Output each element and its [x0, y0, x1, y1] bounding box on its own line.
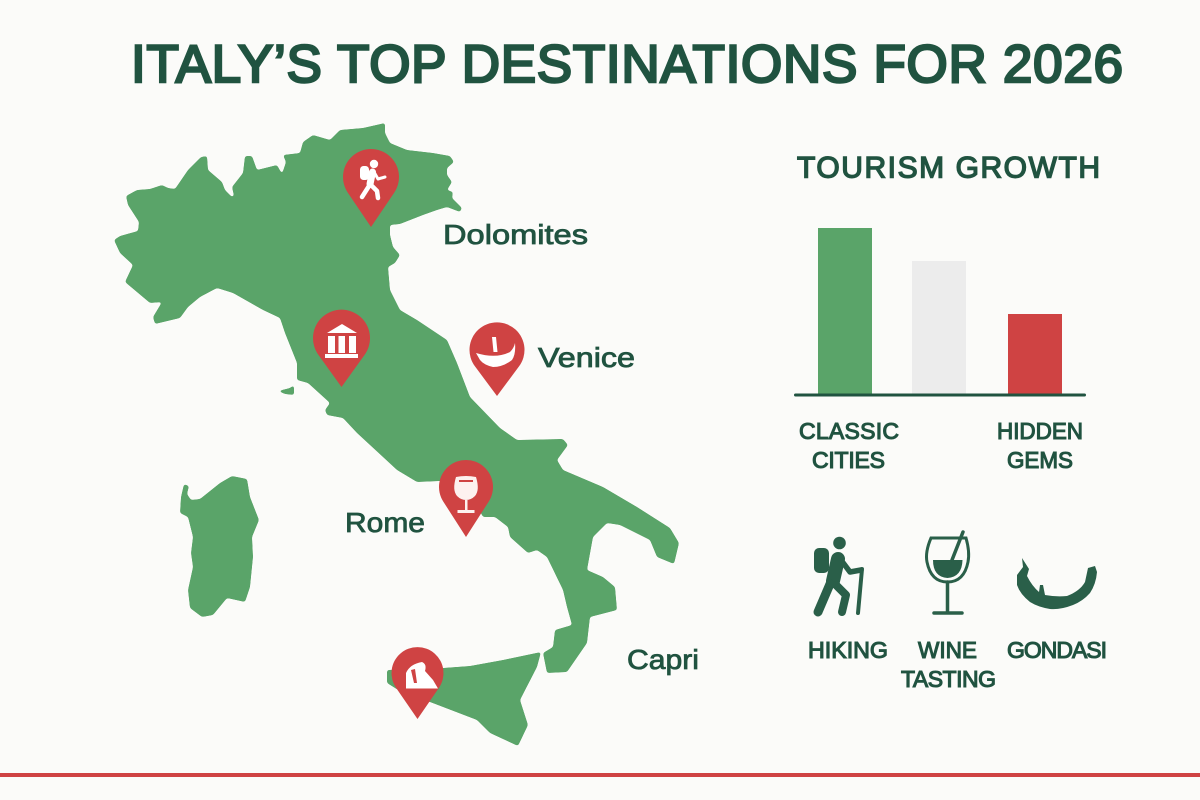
chart heading: TOURISM GROWTH	[797, 152, 1100, 184]
pin: wine (Rome)	[439, 460, 493, 537]
bar label: hidden gems	[997, 418, 1083, 473]
label: Dolomites: Dolomites	[443, 219, 588, 250]
bar chart: tourism growth	[794, 228, 1086, 396]
title: ITALY’S TOP DESTINATIONS FOR 2026	[131, 35, 1123, 94]
bar label: classic cities	[799, 418, 899, 473]
icon label: wine tasting	[901, 637, 996, 692]
mainland Italy	[114, 123, 679, 673]
Elba island	[278, 385, 294, 395]
icon label: gondasi: GONDASI	[1007, 637, 1107, 663]
pin: hiking (Dolomites)	[343, 149, 399, 227]
icon: gondola	[1017, 558, 1097, 609]
icon label: wine tasting: TASTING	[901, 666, 996, 692]
pin: statue (Sicily)	[392, 647, 444, 719]
Sicily	[387, 652, 541, 746]
bar: classic cities	[818, 228, 872, 394]
pin: museum (classic cities)	[313, 310, 370, 387]
Sardinia	[180, 476, 259, 617]
bar label: hidden gems: GEMS	[1007, 447, 1073, 473]
axis	[794, 394, 1086, 396]
bar: hidden gems	[1008, 314, 1062, 394]
map of Italy	[114, 123, 679, 746]
pin: gondola (Venice)	[470, 322, 524, 396]
bar label: classic cities: CLASSIC	[799, 418, 899, 444]
bottom rule	[0, 773, 1200, 777]
label: Venice: Venice	[538, 342, 635, 373]
icon: wine glass	[926, 532, 969, 613]
label: Rome: Rome	[345, 507, 425, 538]
bar label: classic cities: CITIES	[812, 447, 885, 473]
icon: hiker	[814, 537, 862, 613]
label: Capri: Capri	[627, 644, 699, 675]
bar label: hidden gems: HIDDEN	[997, 418, 1083, 444]
icon label: wine tasting: WINE	[918, 637, 977, 663]
icon label: hiking: HIKING	[808, 637, 888, 663]
bar: middle	[912, 261, 966, 394]
